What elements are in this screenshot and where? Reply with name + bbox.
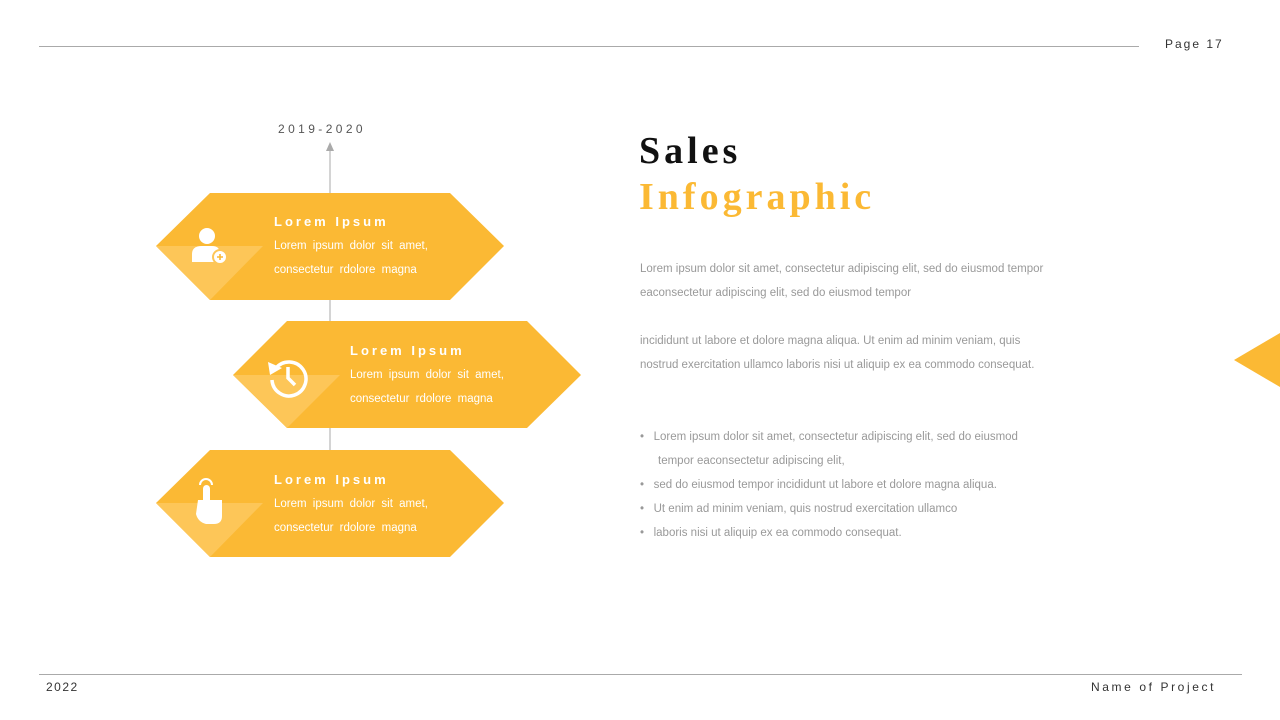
bullet list: • laboris nisi ut aliquip ex ea commodo consequat.: [640, 527, 902, 539]
panel 2 text: Lorem ipsum dolor sit amet,: [350, 369, 504, 381]
decorative triangle: [1234, 333, 1280, 387]
bullet list: • Lorem ipsum dolor sit amet, consectetur adipiscing elit, sed do eiusmod: [640, 431, 1018, 443]
icon: history: [272, 362, 306, 396]
title: Sales: [639, 130, 741, 172]
panel 1 text: [274, 214, 428, 276]
panel 3 text: Lorem ipsum dolor sit amet,: [274, 498, 428, 510]
footer project name: Name of Project: [1091, 680, 1216, 694]
timeline label: 2019-2020: [278, 122, 366, 136]
bullet list: tempor eaconsectetur adipiscing elit,: [658, 455, 845, 467]
panel 1 text: Lorem Ipsum: [274, 214, 389, 229]
panel 3: [156, 450, 504, 557]
panel 1 text: Lorem ipsum dolor sit amet,: [274, 240, 428, 252]
icon: hand pointer: [196, 479, 222, 524]
panel 3 text: consectetur rdolore magna: [274, 522, 417, 534]
panel 2 text: [350, 343, 504, 405]
paragraph 1: Lorem ipsum dolor sit amet, consectetur adipiscing elit, sed do eiusmod tempor: [640, 263, 1043, 275]
panel 2 text: consectetur rdolore magna: [350, 393, 493, 405]
panel 2 text: Lorem Ipsum: [350, 343, 465, 358]
panel 1: [156, 193, 504, 300]
footer year: 2022: [46, 680, 79, 694]
paragraph 2: nostrud exercitation ullamco laboris nisi ut aliquip ex ea commodo consequat.: [640, 359, 1034, 371]
paragraph 2: [640, 335, 1034, 371]
paragraph 2: incididunt ut labore et dolore magna aliqua. Ut enim ad minim veniam, quis: [640, 335, 1020, 347]
bullet list: • Ut enim ad minim veniam, quis nostrud exercitation ullamco: [640, 503, 957, 515]
title: [639, 130, 875, 218]
bullet list: [640, 431, 1018, 539]
bullet list: • sed do eiusmod tempor incididunt ut labore et dolore magna aliqua.: [640, 479, 997, 491]
bottom rule: [39, 674, 1242, 675]
panel 2: [233, 321, 581, 428]
panel 3 text: [274, 472, 428, 534]
paragraph 1: [640, 263, 1044, 299]
top rule: [39, 46, 1139, 47]
page number: Page 17: [1165, 37, 1224, 51]
title: Infographic: [639, 176, 875, 218]
panel 3 text: Lorem Ipsum: [274, 472, 389, 487]
icon: user add: [192, 228, 227, 264]
panel 1 text: consectetur rdolore magna: [274, 264, 417, 276]
timeline diagram: [156, 142, 581, 557]
paragraph 1: eaconsectetur adipiscing elit, sed do eiusmod tempor: [640, 287, 911, 299]
